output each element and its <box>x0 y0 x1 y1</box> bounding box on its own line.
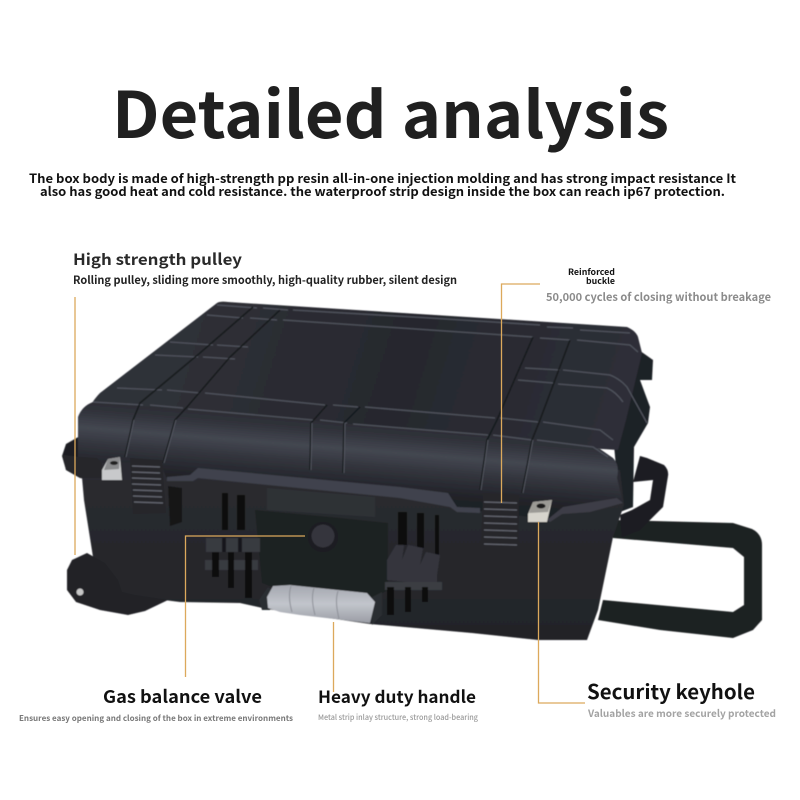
lid top ribs <box>93 305 647 457</box>
buckle heading: Reinforced <box>568 266 615 278</box>
valve heading: Gas balance valve <box>103 684 262 709</box>
left rim <box>63 455 102 478</box>
right hinge group <box>385 512 442 615</box>
pulley leader line <box>74 297 76 555</box>
grey carry handle <box>259 585 382 625</box>
valve description: Ensures easy opening and closing of the box in extreme environments <box>19 713 293 724</box>
callout: high strength pulley <box>73 248 457 555</box>
upper handle hoop <box>620 456 668 537</box>
lid rim highlight <box>167 468 480 513</box>
right keyhole hasp <box>528 500 552 522</box>
lid straps <box>125 307 570 493</box>
handle description: Metal strip inlay structure, strong load-bearing <box>318 712 479 723</box>
wheel <box>67 553 168 615</box>
trolley handle <box>598 520 762 638</box>
right latch <box>481 493 519 553</box>
callout: heavy duty handle <box>318 622 479 723</box>
valve leader line <box>186 536 305 677</box>
left keyhole hasp <box>102 457 122 480</box>
rear lid edge and post <box>610 348 653 512</box>
lid front band <box>78 402 623 520</box>
side wheel lug <box>62 436 90 480</box>
gas balance valve <box>308 522 338 552</box>
product illustration: protective case <box>62 302 762 640</box>
left latch <box>130 458 166 514</box>
keyhole leader line <box>538 522 585 703</box>
handle leader line <box>332 622 334 692</box>
top centre panel <box>267 488 375 517</box>
centre recess <box>255 510 388 600</box>
pulley heading: High strength pulley <box>73 248 242 270</box>
callout: security keyhole <box>538 522 776 720</box>
buckle leader line <box>502 284 540 503</box>
handle heading: Heavy duty handle <box>318 683 476 708</box>
callout: gas balance valve <box>19 536 305 724</box>
intro text block: also has good heat and cold resistance. the waterproof strip design inside the box can reach ip67 protection. <box>40 181 725 200</box>
intro text block: The box body is made of high-strength pp resin all-in-one injection molding and has strong impact resistance It <box>29 168 737 187</box>
keyhole heading: Security keyhole <box>587 676 755 705</box>
left corner recess <box>168 486 182 526</box>
lower body <box>80 455 624 640</box>
callout: reinforced buckle <box>502 266 771 503</box>
keyhole description: Valuables are more securely protected <box>587 705 776 720</box>
title: Detailed analysis <box>112 65 669 157</box>
intro text block <box>29 168 737 200</box>
pulley description: Rolling pulley, sliding more smoothly, high-quality rubber, silent design <box>73 272 457 288</box>
buckle heading: buckle <box>586 275 615 287</box>
right rim highlight <box>547 498 623 522</box>
buckle description: 50,000 cycles of closing without breakage <box>546 289 771 305</box>
left hinge group <box>205 493 260 598</box>
lid top <box>90 302 642 450</box>
